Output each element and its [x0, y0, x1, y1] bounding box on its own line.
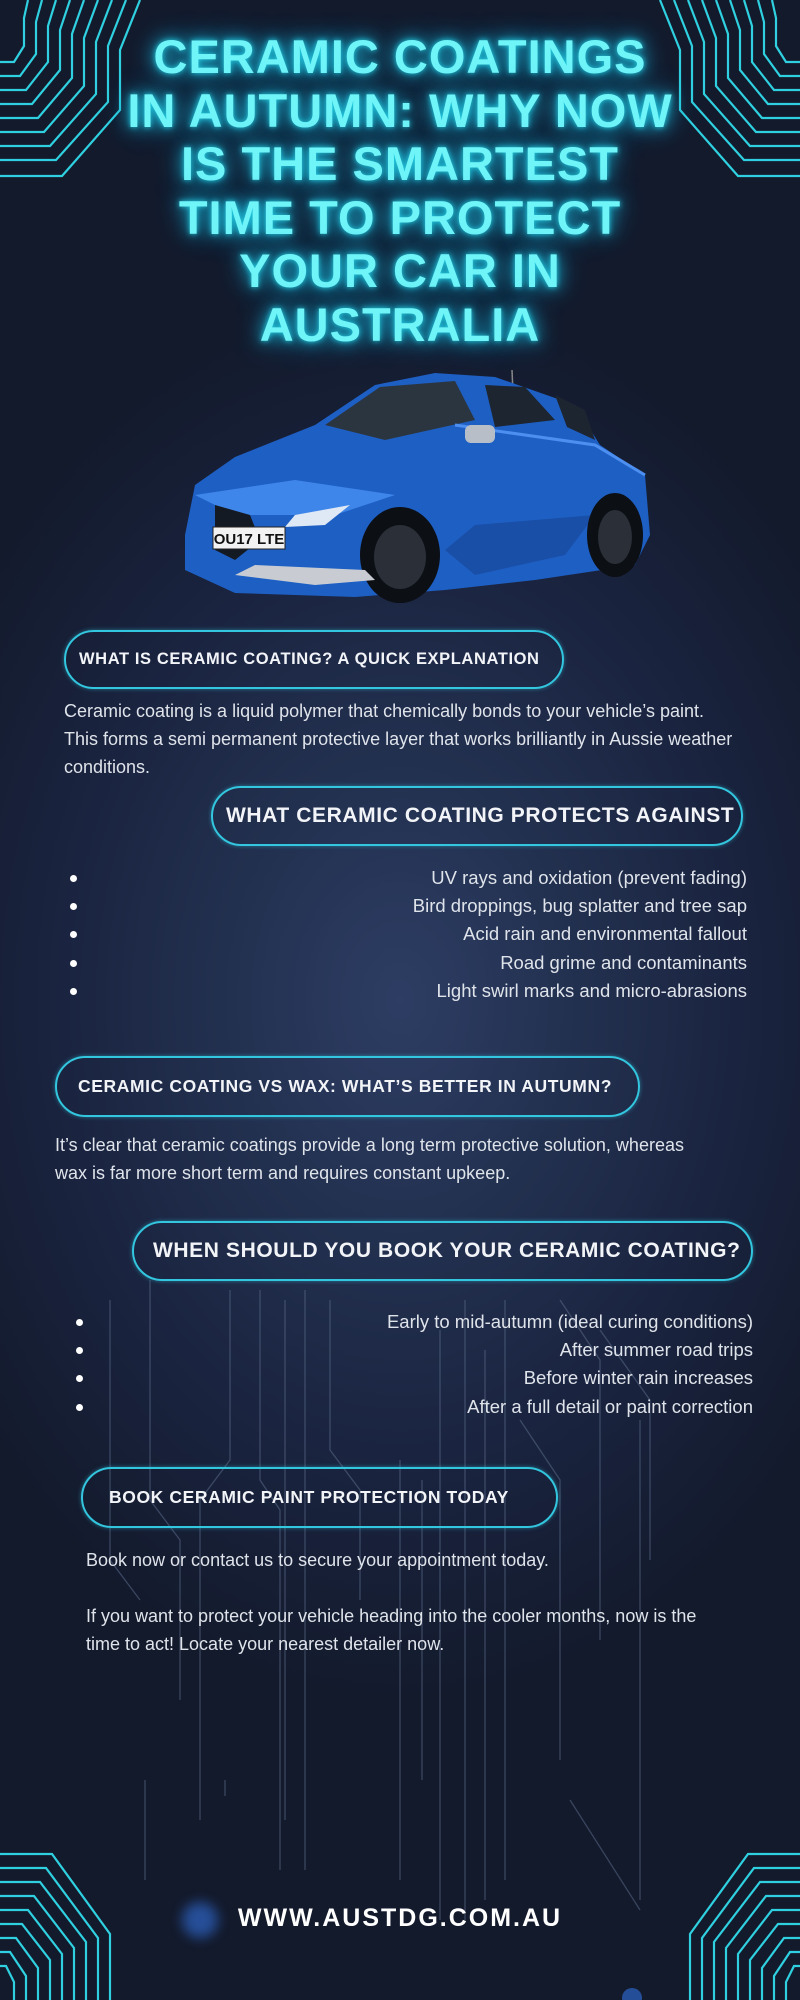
pill heading: when to book: WHEN SHOULD YOU BOOK YOUR CERAMIC COATING?: [153, 1239, 741, 1262]
list: protects against: [70, 867, 747, 1001]
list: when to book: Early to mid-autumn (ideal curing conditions): [387, 1311, 753, 1332]
text: vs wax: [55, 1135, 684, 1183]
text: call to action: [86, 1550, 696, 1654]
pill heading: book today: [81, 1467, 558, 1528]
list: protects against: Road grime and contaminants: [500, 952, 747, 973]
list: protects against: UV rays and oxidation (prevent fading): [431, 867, 747, 888]
pill heading: book today: BOOK CERAMIC PAINT PROTECTION TODAY: [109, 1487, 509, 1507]
corner circuit top-right: [659, 0, 800, 178]
car illustration: [185, 370, 650, 603]
title: IN AUTUMN: WHY NOW: [127, 84, 673, 136]
list: protects against: Acid rain and environmental fallout: [463, 923, 747, 944]
corner circuit top-left: [0, 0, 141, 178]
text: call to action: If you want to protect your vehicle heading into the cooler months, now is the: [86, 1606, 696, 1626]
pill heading: protects against: [211, 786, 743, 846]
pill heading: vs wax: CERAMIC COATING VS WAX: WHAT’S BETTER IN AUTUMN?: [78, 1076, 612, 1096]
title: CERAMIC COATINGS: [154, 30, 646, 83]
pill heading: protects against: WHAT CERAMIC COATING PROTECTS AGAINST: [226, 804, 734, 827]
title: TIME TO PROTECT: [179, 190, 621, 244]
text: explanation: conditions.: [64, 757, 150, 777]
corner circuit bottom-left: [0, 1852, 112, 2000]
corner circuit bottom-right: [688, 1852, 800, 2000]
text: explanation: [64, 701, 732, 777]
text: vs wax: It’s clear that ceramic coatings provide a long term protective solution, whereas: [55, 1135, 684, 1155]
title: YOUR CAR IN: [239, 244, 561, 297]
title: AUSTRALIA: [260, 298, 540, 350]
list: protects against: Bird droppings, bug splatter and tree sap: [413, 895, 747, 916]
pill heading: when to book: [132, 1221, 753, 1281]
footer url: WWW.AUSTDG.COM.AU: [238, 1904, 562, 1932]
pill heading: vs wax: [55, 1056, 640, 1117]
list: when to book: After a full detail or paint correction: [467, 1396, 753, 1417]
text: explanation: Ceramic coating is a liquid polymer that chemically bonds to your vehicle’s paint.: [64, 701, 704, 721]
list: when to book: After summer road trips: [560, 1339, 753, 1360]
list: protects against: Light swirl marks and micro-abrasions: [436, 980, 747, 1001]
text: vs wax: wax is far more short term and requires constant upkeep.: [55, 1163, 510, 1183]
list: when to book: [76, 1311, 753, 1417]
title: [114, 22, 686, 358]
text: explanation: This forms a semi permanent protective layer that works brilliantly in Aussie weather: [64, 729, 732, 749]
title: IS THE SMARTEST: [181, 137, 619, 190]
pill heading: what is ceramic coating: WHAT IS CERAMIC COATING? A QUICK EXPLANATION: [79, 650, 540, 668]
car illustration: OU17 LTE: [214, 531, 284, 548]
pill heading: what is ceramic coating: [64, 630, 564, 689]
text: call to action: time to act! Locate your nearest detailer now.: [86, 1634, 444, 1654]
text: call to action: Book now or contact us to secure your appointment today.: [86, 1550, 549, 1570]
list: when to book: Before winter rain increases: [524, 1367, 753, 1388]
